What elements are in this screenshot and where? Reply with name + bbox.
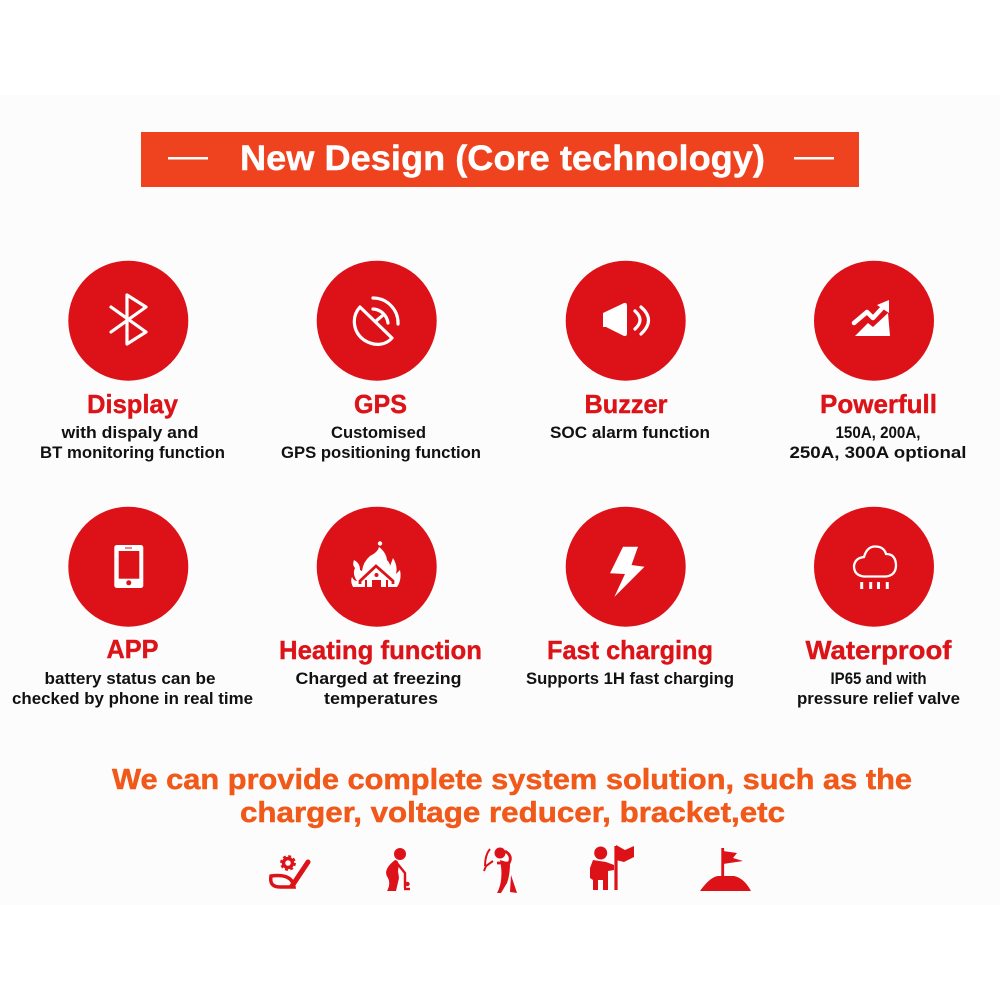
icon: golfer swinging	[484, 848, 517, 893]
feature: Display: Display	[87, 389, 179, 419]
icon: lightning bolt	[610, 547, 644, 597]
feature: Powerfull: Powerfull	[820, 389, 937, 419]
feature: Fast charging: Fast charging	[547, 635, 713, 665]
closing statement	[112, 764, 912, 829]
feature: Display: BT monitoring function	[40, 444, 225, 462]
feature: Heating function	[279, 507, 482, 708]
feature: Powerfull: 250A, 300A optional	[790, 444, 966, 462]
title banner: New Design (Core technology)	[240, 139, 765, 178]
icon: rising chart	[854, 300, 890, 336]
feature: Waterproof: IP65 and with	[830, 670, 926, 688]
feature: APP: battery status can be	[44, 670, 215, 688]
feature: APP: APP	[106, 634, 158, 664]
feature: GPS: GPS positioning function	[281, 444, 481, 462]
feature: Waterproof: Waterproof	[806, 635, 952, 665]
feature: Fast charging	[526, 507, 734, 688]
feature: Waterproof: pressure relief valve	[797, 690, 960, 708]
icon: club and flower	[271, 856, 308, 887]
feature: Buzzer: SOC alarm function	[550, 424, 710, 442]
feature: APP	[12, 507, 253, 708]
icon: person with flag	[590, 845, 634, 890]
icon: bluetooth	[111, 295, 146, 344]
feature: GPS: GPS	[354, 389, 407, 419]
icon: house on fire	[351, 541, 401, 588]
feature: Buzzer	[550, 261, 710, 442]
feature: Buzzer: Buzzer	[584, 389, 668, 419]
feature: Heating function: Heating function	[279, 635, 482, 665]
feature: APP: checked by phone in real time	[12, 690, 253, 708]
feature: Display: with dispaly and	[60, 424, 199, 442]
icon: golfer putting	[386, 848, 410, 891]
icon: rain cloud	[854, 546, 896, 589]
icon row: golf	[271, 845, 751, 893]
feature: GPS: Customised	[331, 424, 426, 442]
icon: satellite dish	[354, 298, 398, 344]
feature: Heating function: temperatures	[324, 690, 438, 708]
feature: Waterproof	[797, 507, 960, 708]
icon: smartphone	[114, 545, 143, 588]
feature: Heating function: Charged at freezing	[296, 670, 462, 688]
closing statement: We can provide complete system solution, such as the	[112, 764, 912, 796]
title banner	[141, 132, 859, 187]
feature: Display	[40, 261, 225, 462]
icon: flag on hill	[700, 848, 751, 891]
feature: Powerfull	[790, 261, 966, 462]
feature: GPS	[281, 261, 481, 462]
feature: Powerfull: 150A, 200A,	[836, 424, 920, 442]
feature: Fast charging: Supports 1H fast charging	[526, 670, 734, 688]
closing statement: charger, voltage reducer, bracket,etc	[240, 797, 785, 829]
icon: speaker	[603, 303, 648, 336]
